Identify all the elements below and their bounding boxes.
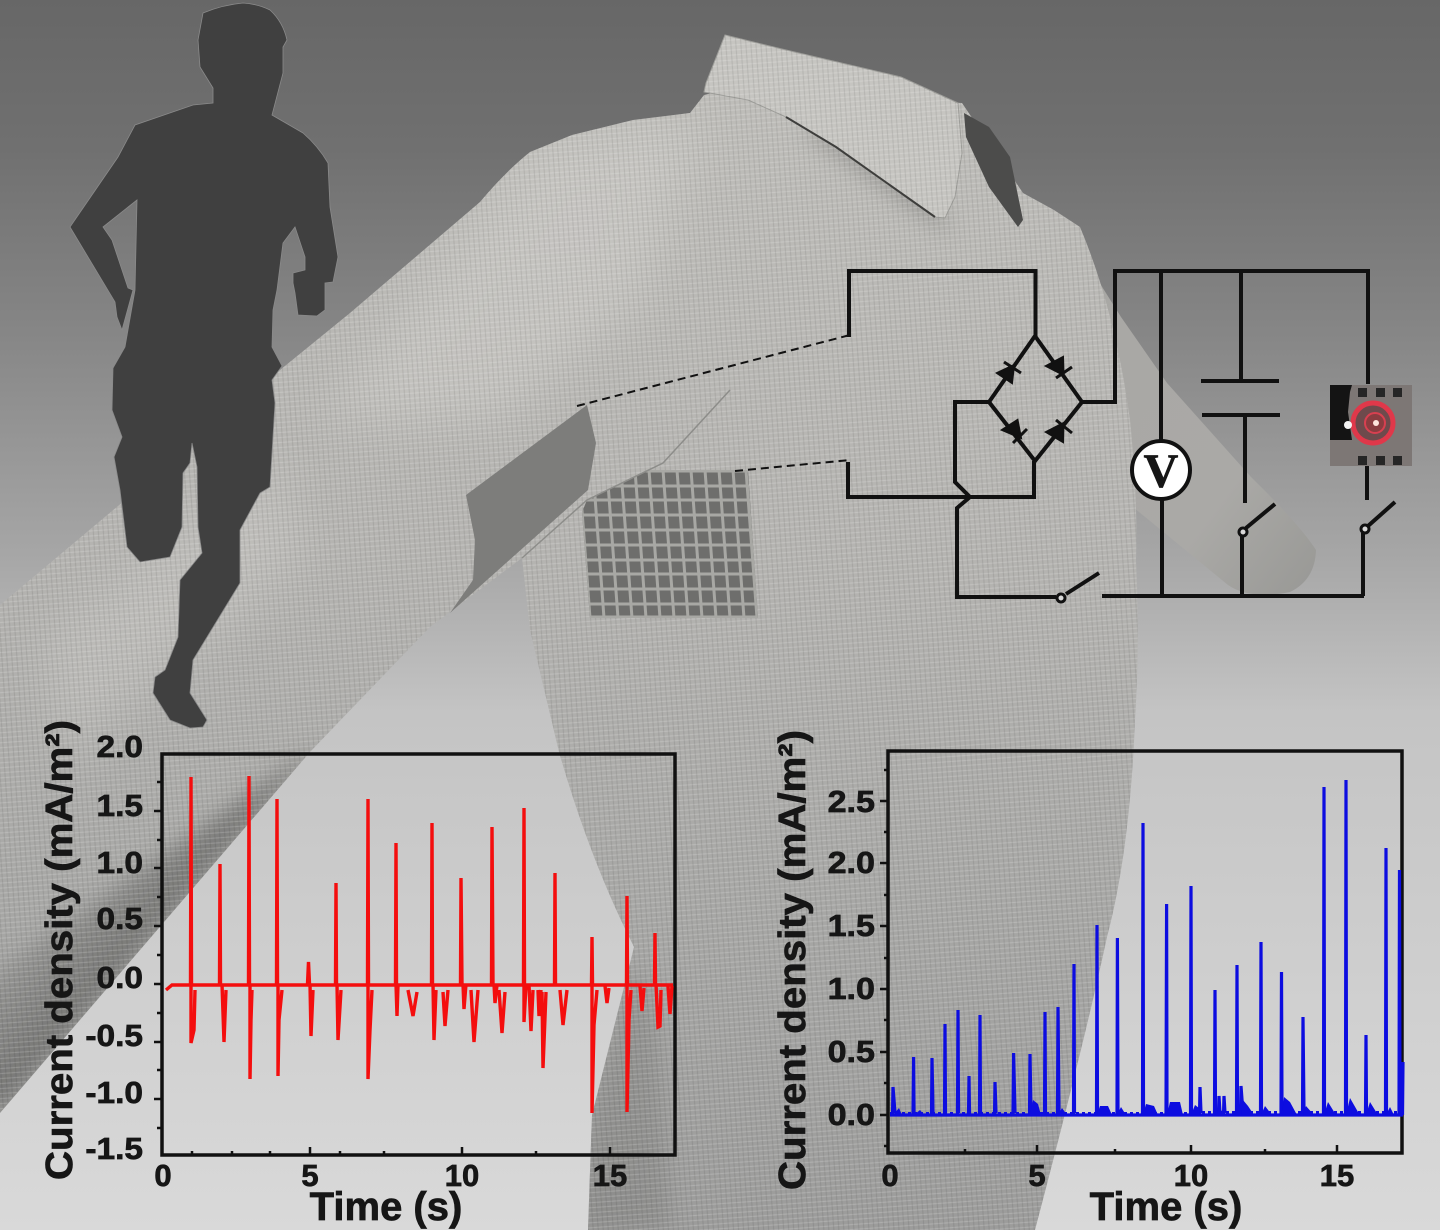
icon: diodes (997, 357, 1072, 443)
y tick labels: -1.5 (85, 1131, 143, 1166)
dashed connector lines (577, 335, 850, 471)
blue trace (890, 780, 1403, 1115)
x tick labels: 10 (445, 1158, 479, 1193)
bottom wire (1102, 594, 1364, 598)
y tick labels: 2.5 (828, 784, 875, 819)
crossover wire (955, 402, 1056, 597)
rectifier lower wire (848, 461, 1034, 497)
LED switch (1363, 466, 1395, 596)
collar weave (704, 35, 962, 218)
y tick labels: 0.0 (828, 1097, 875, 1132)
circuit diagram (848, 271, 1395, 602)
y tick labels: -1.0 (85, 1075, 143, 1110)
x tick labels (881, 1158, 1354, 1193)
main switch (1066, 573, 1099, 594)
y tick labels: 1.5 (828, 908, 875, 943)
icon: lit LED photo (1330, 385, 1412, 466)
x tick labels: 10 (1174, 1158, 1208, 1193)
woven grid electrode (582, 470, 758, 618)
shirt body and left arm (0, 90, 1138, 1230)
x tick labels: 0 (881, 1158, 899, 1193)
icon: voltmeter: V (1144, 445, 1179, 498)
y tick labels: 0.5 (96, 901, 143, 936)
right sleeve (1040, 225, 1316, 595)
y tick labels: -0.5 (85, 1018, 143, 1053)
output wires (1082, 271, 1368, 402)
blue decay humps (893, 1097, 1394, 1115)
capacitor (1201, 271, 1280, 503)
x axis title: Time (s) (1090, 1185, 1242, 1229)
collar seam (786, 117, 935, 217)
y tick labels: 2.0 (96, 729, 143, 764)
red trace (166, 776, 673, 1113)
x axis title: Time (s) (310, 1185, 462, 1229)
icon: runner silhouette (70, 3, 338, 728)
blue baseline noise (890, 1112, 1402, 1114)
collar (704, 35, 962, 218)
x tick labels: 5 (1028, 1158, 1046, 1193)
plot frame (888, 751, 1402, 1153)
x tick labels: 15 (593, 1158, 627, 1193)
x tick labels: 15 (1320, 1158, 1354, 1193)
switch contacts (1057, 525, 1369, 602)
fabric patch on arm (450, 405, 596, 613)
y axis title: Current density (mA/m²) (39, 720, 81, 1180)
y tick labels: 1.5 (96, 788, 143, 823)
x tick labels (154, 1158, 627, 1193)
y tick labels (828, 784, 875, 1132)
y tick labels: 0.0 (96, 960, 143, 995)
x tick labels: 0 (154, 1158, 172, 1193)
capacitor switch (1242, 504, 1275, 596)
y tick labels: 1.0 (828, 971, 875, 1006)
x tick labels: 5 (301, 1158, 319, 1193)
icon: voltmeter (1132, 441, 1190, 499)
arm fold crease (522, 390, 730, 558)
ticks (880, 770, 1337, 1153)
chart: red current density (39, 720, 675, 1229)
y axis title: Current density (mA/m²) (772, 730, 814, 1190)
collar inner shadow (964, 113, 1023, 227)
plot frame (162, 754, 675, 1155)
y tick labels: 2.0 (828, 845, 875, 880)
y tick labels: 0.5 (828, 1034, 875, 1069)
y tick labels (85, 729, 143, 1166)
bridge diamond (989, 336, 1082, 461)
chart: blue current density (772, 730, 1403, 1229)
ticks (154, 782, 610, 1155)
rectifier input wires (849, 271, 1036, 337)
voltmeter branch (1161, 271, 1162, 596)
y tick labels: 1.0 (96, 845, 143, 880)
